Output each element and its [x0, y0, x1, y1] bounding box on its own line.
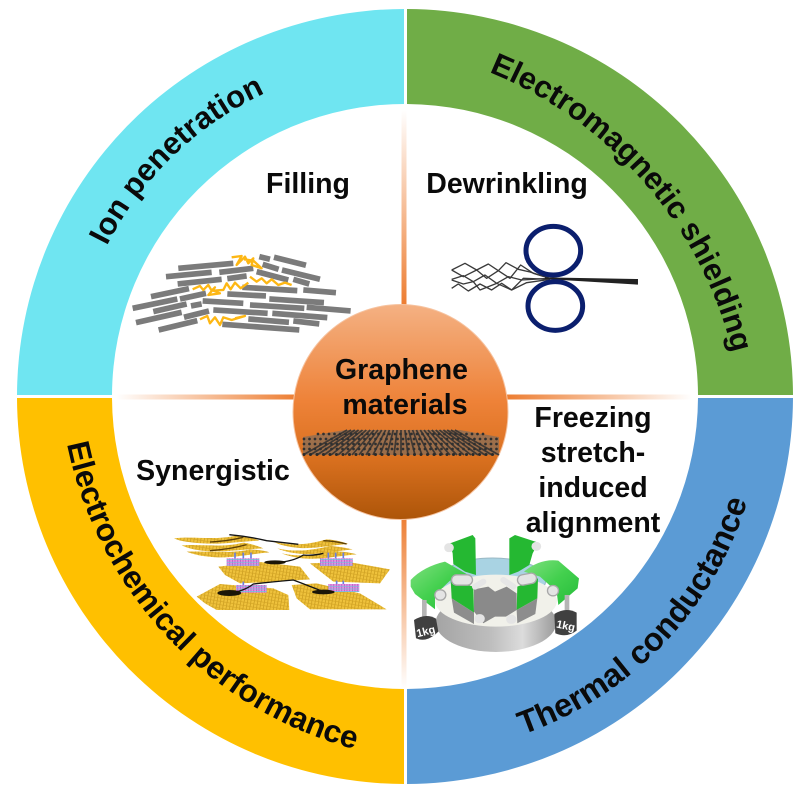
panel: thermal conductance segment [407, 398, 793, 784]
icon: left 1 kg weight [414, 600, 438, 640]
divider line: right [506, 394, 692, 400]
divider line: bottom [402, 515, 406, 689]
heading: electrochemical performance: Electrochemical performance [67, 441, 356, 748]
icon: upper roller [526, 226, 581, 275]
panel: electrochemical performance segment [17, 398, 404, 784]
illustration: dewrinkling rollers [452, 226, 638, 330]
heading: graphene materials [335, 354, 468, 421]
icon: sheets and rollers [411, 535, 579, 624]
label: synergistic: Synergistic [136, 455, 290, 487]
panel: ion penetration segment [17, 9, 404, 395]
label: dewrinkling: Dewrinkling [426, 168, 588, 200]
icon: right 1 kg weight: 1kg [555, 619, 576, 634]
label: freezing stretch-induced alignment: stretch- [541, 437, 645, 469]
heading: electromagnetic shielding: Electromagnetic shielding [491, 53, 748, 352]
heading: ion penetration: Ion penetration [88, 80, 264, 244]
heading: graphene materials: materials [342, 389, 468, 421]
label: filling: Filling [266, 168, 350, 200]
icon: right 1 kg weight [554, 595, 577, 635]
label: freezing stretch-induced alignment [526, 402, 661, 539]
illustration: freezing stretch device [411, 535, 579, 652]
icon: left 1 kg weight: 1kg [415, 624, 437, 640]
icon: lower roller [528, 282, 583, 330]
illustration: graphene sheet [303, 430, 499, 455]
label: freezing stretch-induced alignment: Freezing [534, 402, 652, 434]
central circle: graphene materials [293, 304, 508, 520]
divider line: top [402, 110, 406, 305]
heading: thermal conductance: Thermal conductance [515, 498, 746, 732]
divider line: left [116, 394, 298, 400]
panel: electromagnetic shielding segment [407, 9, 793, 395]
illustration: filling bricks and polymer [133, 256, 351, 330]
heading: graphene materials: Graphene [335, 354, 468, 386]
label: freezing stretch-induced alignment: induced [538, 472, 648, 504]
illustration: synergistic layered sheets [174, 535, 390, 610]
label: freezing stretch-induced alignment: alignment [526, 507, 661, 539]
